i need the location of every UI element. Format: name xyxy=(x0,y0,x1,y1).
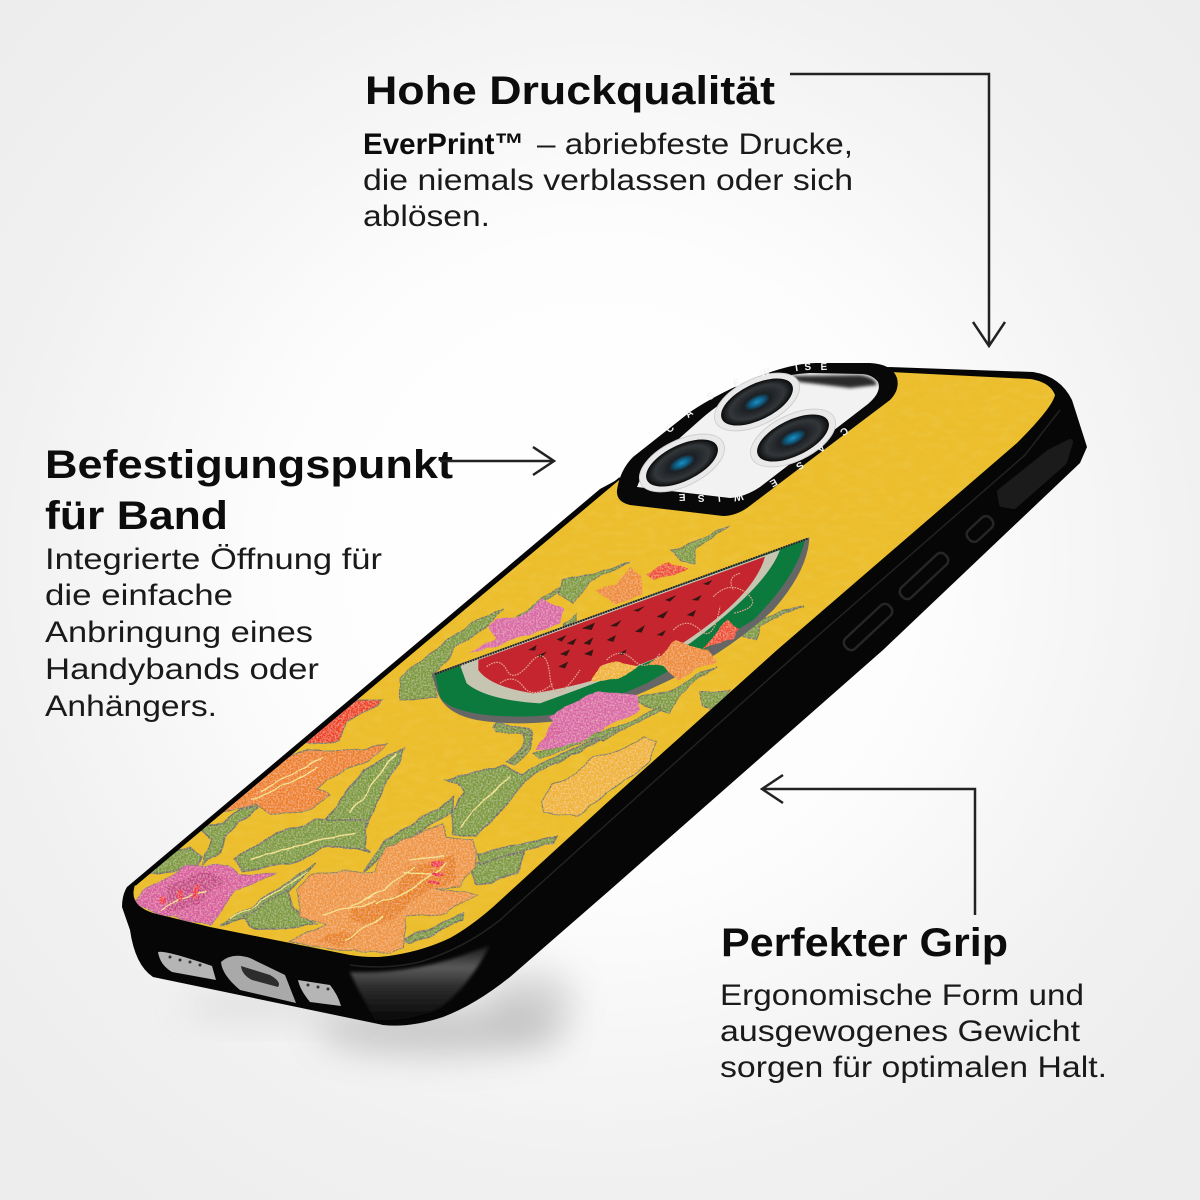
bump lettering: E xyxy=(732,377,743,390)
lens: top xyxy=(706,361,808,443)
bump lettering: E xyxy=(820,362,828,373)
corner highlight xyxy=(350,945,490,1020)
floral print, bottom xyxy=(135,700,657,953)
callout: perfect grip xyxy=(720,921,1107,1084)
watermelon xyxy=(432,537,809,723)
side slot xyxy=(1000,442,1070,506)
body text: print quality: die niemals verblassen oder sich xyxy=(363,164,853,197)
arrow: to back print xyxy=(790,74,1005,346)
heading: perfect grip: Perfekter Grip xyxy=(721,921,1008,965)
bump lettering: I xyxy=(717,492,721,503)
body text: strap attachment: Handybands oder xyxy=(45,653,319,686)
bump lettering: C xyxy=(837,424,850,437)
callout: strap attachment xyxy=(45,443,453,723)
bump lettering: E xyxy=(767,476,779,489)
body text: print quality: – abriebfeste Drucke, xyxy=(537,128,853,161)
phone shadow xyxy=(180,970,575,1054)
body text: strap attachment: die einfache xyxy=(45,579,233,612)
floral print, front of melon xyxy=(537,620,740,750)
lens: left xyxy=(631,422,733,504)
bump lettering: E xyxy=(678,491,686,502)
body text: perfect grip: sorgen für optimalen Halt. xyxy=(720,1051,1107,1084)
bump lettering: S xyxy=(705,390,717,403)
camera top shade xyxy=(790,375,877,388)
body text: strap attachment: Integrierte Öffnung für xyxy=(45,543,382,576)
heading: strap attachment: Befestigungspunkt xyxy=(45,443,453,487)
floral print xyxy=(135,525,803,953)
back edge line xyxy=(135,478,620,885)
bump lettering xyxy=(664,362,850,503)
inner rim xyxy=(350,410,1060,967)
bump lettering: A xyxy=(814,441,827,454)
side buttons xyxy=(841,514,996,653)
body text: print quality xyxy=(363,128,853,233)
bump lettering: S xyxy=(804,362,812,373)
camera glass plate xyxy=(637,373,879,498)
heading: strap attachment: für Band xyxy=(45,494,228,538)
body text: strap attachment: Anbringung eines xyxy=(45,616,313,649)
bump lettering: A xyxy=(683,407,696,421)
bump lettering: W xyxy=(759,367,772,380)
body text: perfect grip: Ergonomische Form und xyxy=(720,979,1084,1012)
phone case xyxy=(100,340,1100,1026)
bump lettering: C xyxy=(664,423,677,436)
bump lettering: S xyxy=(793,459,805,472)
body text: perfect grip: ausgewogenes Gewicht xyxy=(720,1015,1081,1048)
yellow printed back xyxy=(134,372,1055,957)
lens: right xyxy=(742,397,844,479)
heading: print quality: Hohe Druckqualität xyxy=(365,69,775,113)
arrow: to strap point xyxy=(440,447,554,475)
heading: strap attachment xyxy=(45,443,453,538)
body text: print quality: EverPrint™ xyxy=(363,128,524,161)
body text: strap attachment xyxy=(45,543,382,723)
body text: perfect grip xyxy=(720,979,1107,1084)
watermelon swirls xyxy=(487,573,753,693)
camera bump xyxy=(617,361,898,516)
floral print, around melon back xyxy=(400,525,803,765)
callout: print quality xyxy=(363,69,853,233)
watermelon seeds xyxy=(528,580,713,668)
arrow: to phone grip xyxy=(762,775,975,915)
bump lettering: W xyxy=(732,490,744,503)
bottom ports xyxy=(158,952,341,1006)
case body xyxy=(122,365,1087,1026)
body text: strap attachment: Anhängers. xyxy=(45,690,217,723)
bump lettering: S xyxy=(697,492,705,503)
body text: print quality: ablösen. xyxy=(363,200,490,233)
bump lettering: I xyxy=(795,363,799,374)
